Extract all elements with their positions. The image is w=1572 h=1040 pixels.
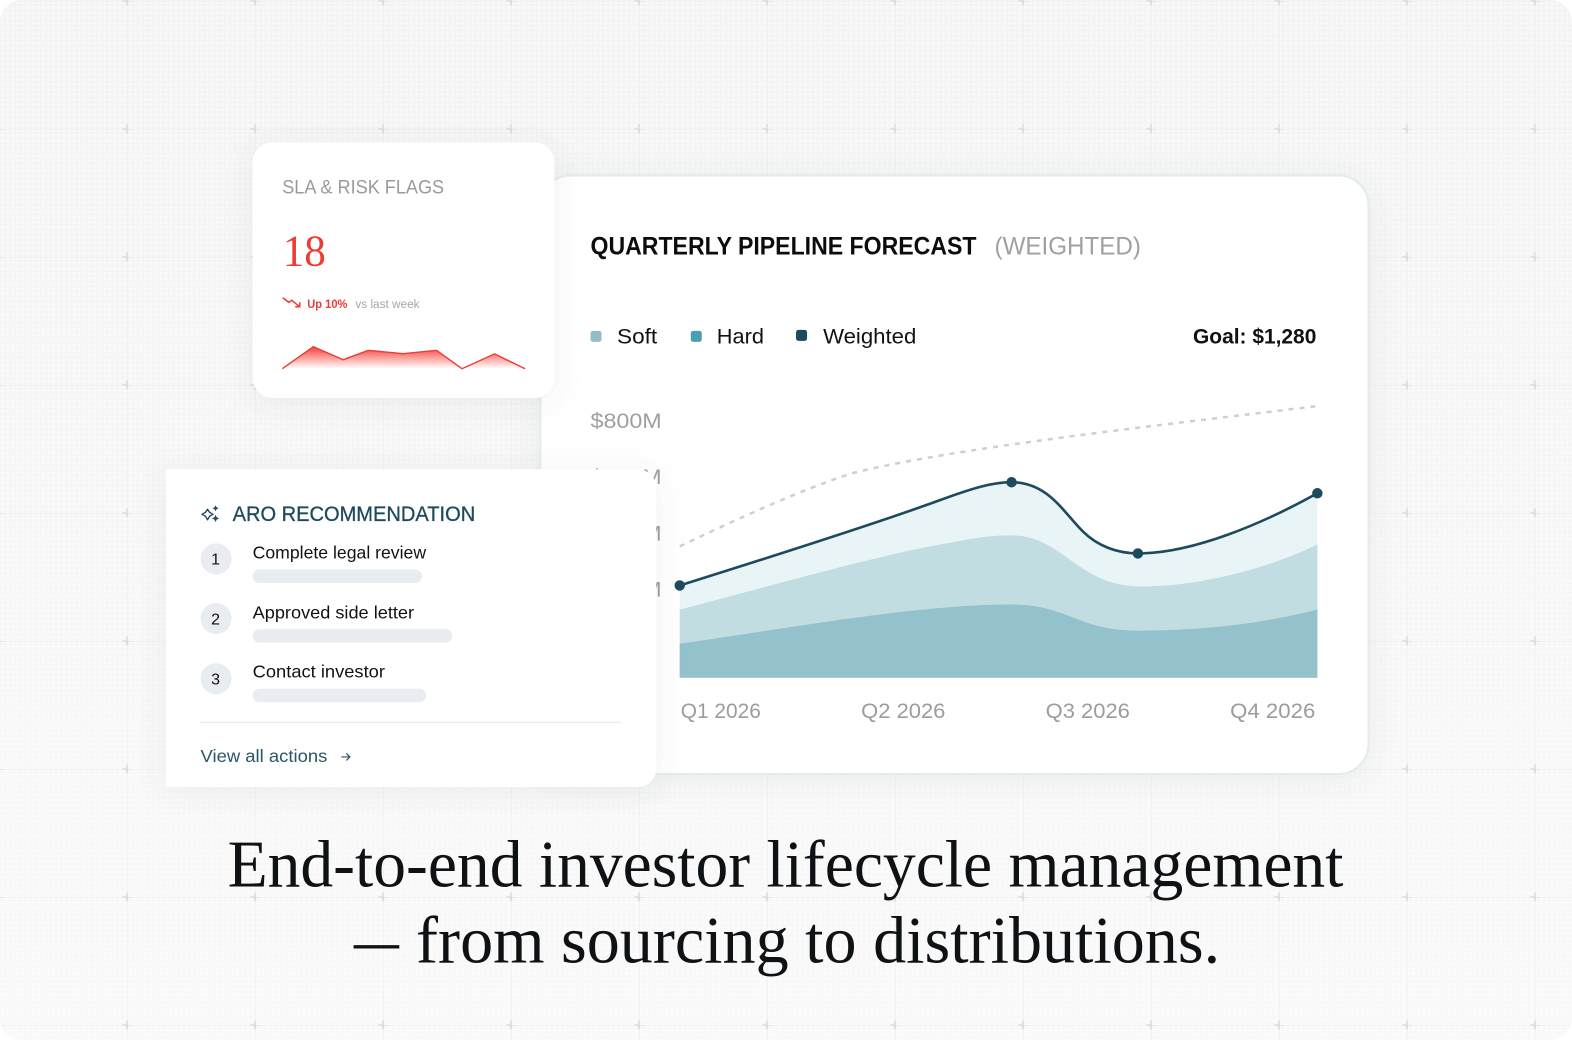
headline <box>228 826 1344 977</box>
recommendation 3: 3 <box>211 671 220 689</box>
recommendation 3 <box>201 662 426 702</box>
icon: sparkle <box>202 505 219 522</box>
headline: from sourcing to distributions. <box>416 902 1220 977</box>
recommendation 2 <box>201 603 452 643</box>
panel: quarterly pipeline forecast <box>540 175 1368 774</box>
sparkline <box>282 347 525 369</box>
icon: trend arrow <box>283 298 300 307</box>
panel: ARO recommendation <box>166 469 656 787</box>
metric value: 18 <box>283 227 326 276</box>
area chart <box>675 406 1323 678</box>
x-axis labels: Q4 2026 <box>1230 700 1315 723</box>
trend text <box>307 297 421 311</box>
data points <box>675 477 1323 591</box>
trend text: Up 10% <box>307 297 348 311</box>
headline: End-to-end investor lifecycle management <box>228 826 1344 901</box>
legend: Weighted <box>823 325 916 348</box>
headline: — <box>353 902 400 977</box>
panel heading: ARO RECOMMENDATION <box>233 503 475 526</box>
goal dashed line <box>680 406 1317 546</box>
x-axis labels: Q3 2026 <box>1046 700 1130 723</box>
x-axis labels <box>681 700 1315 723</box>
y-axis labels: $200M <box>591 579 662 602</box>
chart title: (WEIGHTED) <box>995 233 1141 261</box>
recommendation 1: Complete legal review <box>253 542 426 562</box>
y-axis labels <box>591 410 662 602</box>
recommendation 1: 1 <box>211 550 220 568</box>
card label: SLA & RISK FLAGS <box>282 177 444 198</box>
x-axis labels: Q2 2026 <box>861 700 945 723</box>
weighted line <box>680 482 1317 585</box>
x-axis labels: Q1 2026 <box>681 700 761 723</box>
trend text: vs last week <box>355 297 421 311</box>
y-axis labels: $600M <box>591 466 662 489</box>
y-axis labels: $400M <box>591 522 662 545</box>
legend: Hard <box>717 325 764 348</box>
recommendation 1 <box>201 542 426 583</box>
legend <box>591 325 916 348</box>
recommendation 2: Approved side letter <box>253 603 414 623</box>
legend: Soft <box>617 325 657 348</box>
recommendation 2: 2 <box>211 611 220 629</box>
link: view all actions: View all actions <box>201 746 328 766</box>
chart title: QUARTERLY PIPELINE FORECAST <box>591 233 977 261</box>
goal label: Goal: $1,280 <box>1193 325 1316 348</box>
recommendation 3: Contact investor <box>253 662 385 682</box>
icon: arrow <box>341 753 350 760</box>
panel: SLA and risk flags <box>253 142 554 398</box>
y-axis labels: $800M <box>591 410 662 433</box>
